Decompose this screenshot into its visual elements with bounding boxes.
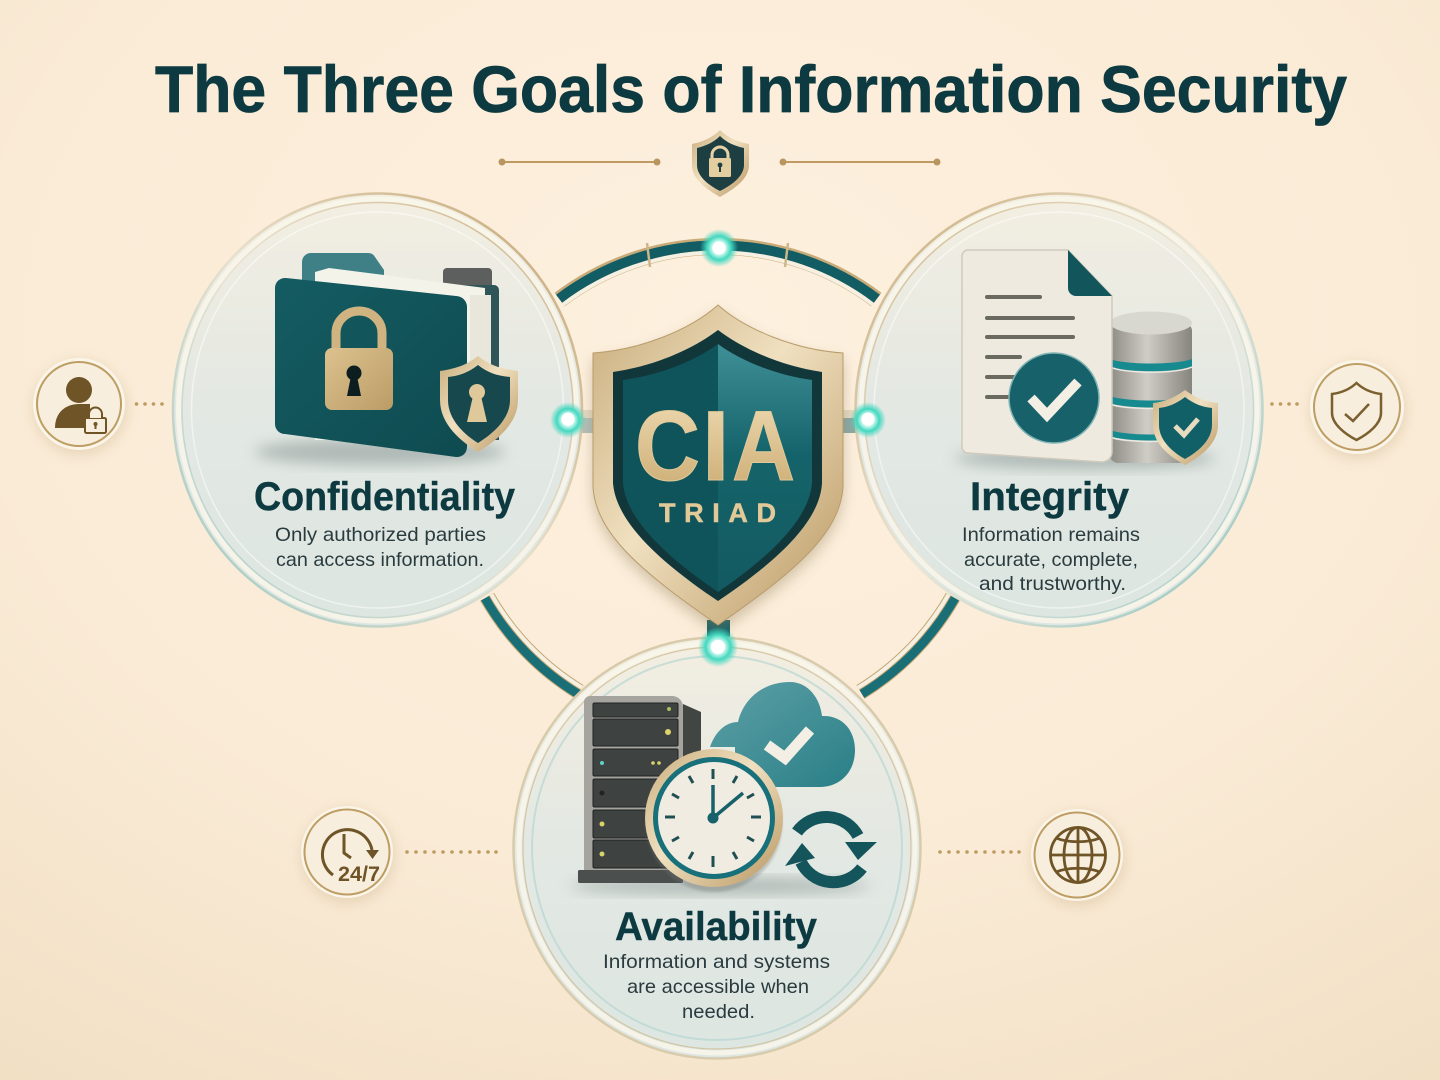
panel: confidentiality [172,193,582,627]
glass circle [172,193,582,627]
icon badge: globe [1031,809,1124,905]
heading: confidentiality: Confidentiality [254,475,516,519]
description: availability: Information and systems [603,951,830,973]
dotted connector: right [1270,402,1299,406]
icon badge: user with lock [33,358,126,454]
icon: server rack [578,696,701,883]
description: availability: needed. [682,1001,755,1023]
dotted connector: globe [938,850,1021,854]
connectors between shield and circles [578,410,860,644]
heading: availability: Availability [615,905,818,949]
icon badge: 24/7 clock [301,806,394,902]
icon: server, clock, cloud and sync arrows [570,682,877,894]
CIA label: A [732,390,795,501]
central CIA shield [593,305,843,632]
icon: folder with padlock and shield [255,253,518,465]
connecting ring: lower left arc [485,594,582,694]
icon badge: shield with check [1310,360,1405,458]
dotted connector: 24/7 [405,850,498,854]
heading: integrity: Integrity [970,475,1130,519]
CIA label [635,390,795,501]
description: confidentiality: Only authorized parties [275,524,486,546]
glass circle [513,637,921,1059]
dotted connector: left [135,402,164,406]
glass circle [855,193,1263,627]
title divider with shield [498,130,940,197]
description: integrity: Information remains [962,524,1140,546]
description: availability [603,951,830,1023]
glowing node: left [550,402,586,438]
glowing node: top [700,229,738,267]
description: availability: are accessible when [627,976,809,998]
glowing node: right [850,402,886,438]
description: confidentiality: can access information. [276,549,484,571]
glowing node: bottom [698,627,738,667]
panel: integrity [855,193,1263,627]
description: integrity: and trustworthy. [979,573,1126,595]
icon: sync arrows [785,817,877,882]
CIA label: C [635,390,700,501]
connecting ring: upper arc [559,243,877,304]
icon: document with check, database and shield [955,250,1218,469]
CIA label: I [702,390,730,501]
description: confidentiality [275,524,486,571]
TRIAD label: TRIAD [659,498,776,528]
icon: clock [645,749,783,892]
icon: cloud [710,682,855,787]
description: integrity: accurate, complete, [964,549,1138,571]
description: integrity [962,524,1140,595]
panel: availability [513,637,921,1059]
icon badge: 24/7 clock: 24/7 [338,863,380,886]
title: The Three Goals of Information Security [155,52,1347,126]
connecting ring: lower right arc [858,594,955,694]
